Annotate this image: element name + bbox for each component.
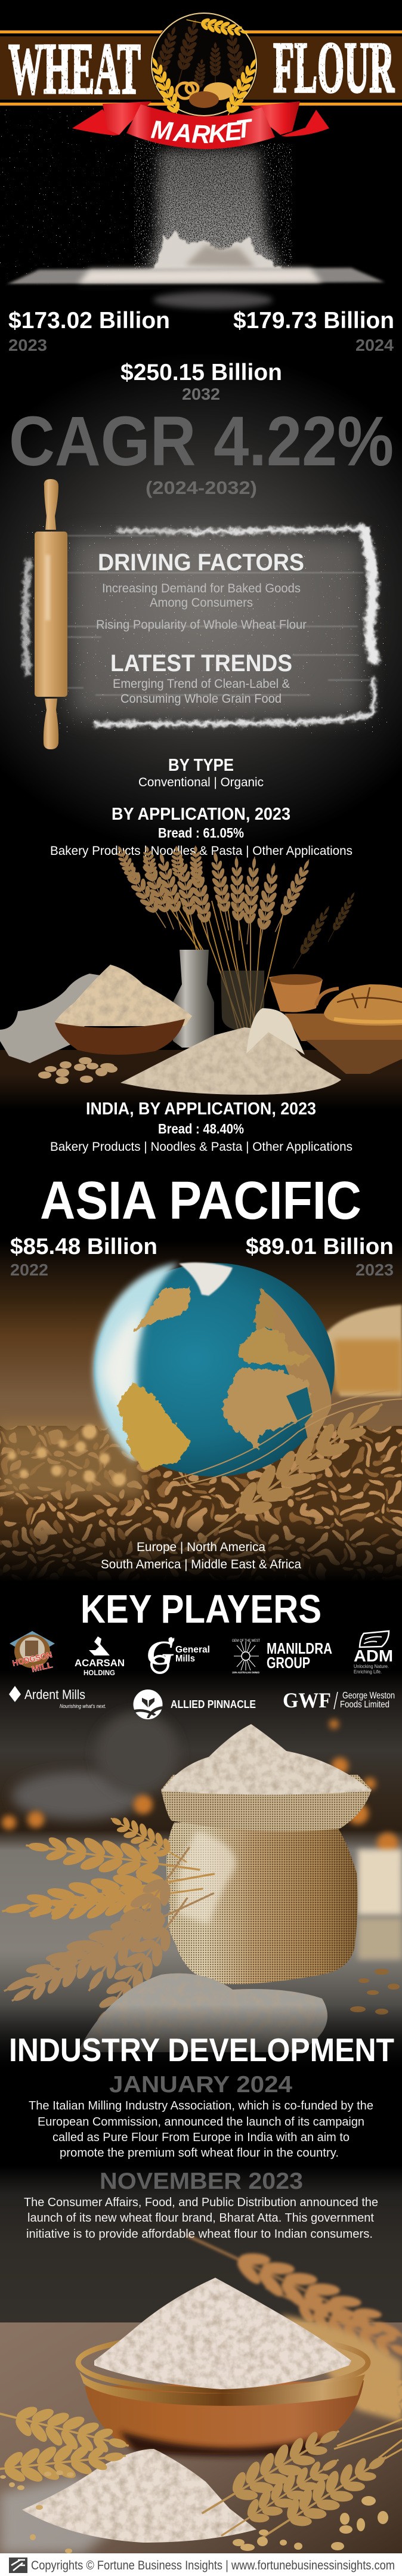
bokeh background (2, 1712, 402, 1960)
logo: Ardent Mills: Ardent Mills (24, 1687, 85, 1702)
text block: January 2024 (29, 2099, 373, 2160)
text block: latest trends (113, 677, 290, 706)
stat: Asia Pacific 2023 (246, 1234, 394, 1279)
heading: Asia Pacific: ASIA PACIFIC (40, 1171, 361, 1231)
stat: Asia Pacific 2023: $89.01 Billion (246, 1234, 394, 1259)
segment: by type: BY TYPE (168, 756, 234, 775)
flour heap in sack (162, 1724, 372, 1794)
logo: ADM: Unlocking Nature. (354, 1663, 389, 1669)
text block: November 2023: initiative is to provide affordable wheat flour to Indian consumers. (26, 2227, 373, 2241)
segment: India by application: INDIA, BY APPLICATION, 2023 (86, 1099, 316, 1119)
wheat ears left (0, 1806, 222, 2039)
metal bottle (173, 950, 214, 1048)
stat: 2032 market size: 2032 (182, 385, 220, 403)
flour dust explosion (0, 107, 385, 308)
heading: latest trends: LATEST TRENDS (110, 650, 292, 677)
brown band (0, 36, 402, 100)
logo: General Mills: G (147, 1633, 174, 1672)
wheat ear (173, 1386, 402, 1561)
logo: Allied Pinnacle: ALLIED PINNACLE (171, 1698, 256, 1710)
panel: header banner (0, 12, 402, 308)
draped cloth (0, 974, 119, 1063)
wheat ears left (0, 2390, 134, 2492)
heading: November 2023: NOVEMBER 2023 (100, 2169, 303, 2194)
cutting boards (285, 1014, 402, 1074)
bread loaf (324, 984, 402, 1026)
logo: Acarsan Holding (75, 1636, 125, 1677)
panel: flour frame (24, 525, 388, 734)
stat: 2024 market size: $179.73 Billion (233, 308, 394, 333)
stat: 2023 market size (8, 308, 170, 354)
heading: January 2024: JANUARY 2024 (109, 2072, 292, 2098)
grain bed (0, 1423, 402, 1599)
footer (0, 2553, 402, 2576)
red ribbon (72, 101, 329, 149)
logo: Ardent Mills: Nourishing what's next. (60, 1703, 106, 1709)
blurred jar (326, 1305, 402, 1396)
text block: other regions: South America | Middle East & Africa (101, 1558, 301, 1571)
small flour heap (22, 2449, 256, 2543)
heading: driving factors: DRIVING FACTORS (98, 549, 304, 576)
flour heap and cloth (120, 1008, 341, 1095)
stat: 2024 market size (233, 308, 394, 354)
text block: January 2024: European Commission, announced the launch of its campaign (38, 2115, 364, 2129)
segment: by application: BY APPLICATION, 2023 (112, 805, 290, 824)
text block: latest trends: Consuming Whole Grain Food (120, 692, 282, 706)
illustration: bakery still life (0, 843, 402, 1110)
logo: General Mills (147, 1633, 210, 1673)
bowl of flour (55, 965, 192, 1055)
biscuits (38, 1057, 117, 1084)
logo: General Mills: General (175, 1645, 210, 1655)
stat: Asia Pacific 2022: $85.48 Billion (10, 1234, 157, 1259)
flour heap in bowl (94, 2278, 351, 2389)
wheat ears right (191, 2414, 402, 2556)
wooden bowl (78, 2334, 368, 2457)
blurred wheat top right (178, 2217, 402, 2422)
ribbon label: MARKET: MARKET (150, 114, 255, 149)
logo: Hodgson Mill: HODGSON (11, 1650, 53, 1668)
logo: Hodgson Mill: MILL (30, 1660, 54, 1674)
logo: Manildra Group: GEM OF THE WEST (232, 1639, 260, 1643)
text block: November 2023: launch of its new wheat flour brand, Bharat Atta. This government (27, 2211, 374, 2225)
logo: George Weston Foods: Foods Limited (340, 1700, 389, 1710)
segment: by type (138, 756, 264, 789)
segment: by application: Bread : 61.05% (158, 825, 244, 841)
logo: Hodgson Mill (10, 1631, 55, 1674)
logo: Manildra Group: GROUP (267, 1654, 310, 1672)
globe (94, 1262, 335, 1477)
logo: Manildra Group: MANILDRA (267, 1639, 332, 1657)
orange rule bottom (0, 103, 402, 106)
text block: November 2023: The Consumer Affairs, Food, and Public Distribution announced the (24, 2195, 378, 2209)
stat: 2024 market size: 2024 (355, 336, 394, 354)
logo: ADM (354, 1631, 393, 1675)
logo: George Weston Foods (283, 1688, 395, 1712)
logo: Allied Pinnacle (134, 1689, 256, 1719)
segment: India by application (50, 1099, 352, 1154)
segment: India by application: Bread : 48.40% (158, 1121, 244, 1136)
stat: 2023 market size: 2023 (8, 336, 47, 354)
icon: rolling pin (35, 479, 67, 749)
flour drift (78, 1973, 327, 2052)
logo: Manildra Group (232, 1639, 332, 1674)
stat: Asia Pacific 2023: 2023 (355, 1261, 394, 1279)
logo: ADM: ADM (354, 1647, 393, 1665)
panel: header banner: WHEAT (8, 29, 141, 109)
text block: other regions (101, 1540, 301, 1571)
logo: General Mills: Mills (175, 1654, 195, 1664)
stat: CAGR: (2024-2032) (146, 477, 257, 498)
stat: 2023 market size: $173.02 Billion (8, 308, 170, 333)
stat: 2032 market size: $250.15 Billion (120, 360, 282, 385)
stat: 2032 market size (120, 360, 282, 403)
illustration: flour sack (0, 1670, 402, 2070)
logo: Acarsan Holding: HOLDING (84, 1670, 115, 1677)
logo: George Weston Foods: GWF (283, 1688, 331, 1712)
illustration: flour bowl and wheat (0, 2166, 402, 2556)
text block: other regions: Europe | North America (137, 1540, 265, 1554)
orange rule top (0, 30, 402, 33)
logo: Ardent Mills (9, 1686, 106, 1709)
text block: driving factors: Among Consumers (150, 596, 253, 610)
text block: driving factors: Rising Popularity of Whole Wheat Flour (96, 618, 307, 632)
clay cup (269, 974, 339, 1012)
text block: January 2024: promote the premium soft wheat flour in the country. (60, 2146, 339, 2160)
burlap sack (166, 1823, 357, 1984)
icon: wheat emblem (145, 12, 264, 133)
segment: by type: Conventional | Organic (138, 776, 264, 789)
wheat bundle (112, 843, 359, 1031)
logo: Manildra Group: 100% AUSTRALIAN OWNED (232, 1671, 260, 1674)
grain scatter (350, 1969, 400, 2015)
text block: November 2023 (24, 2195, 378, 2241)
illustration: globe on wheat (0, 1241, 402, 1617)
text block: January 2024: called as Pure Flour From Europe in India with an aim to (52, 2130, 350, 2144)
sack collar (161, 1775, 372, 1831)
logo: Acarsan Holding: ACARSAN (75, 1657, 125, 1669)
segment: by application (50, 805, 352, 858)
glass jar (221, 971, 264, 1030)
text block: January 2024: The Italian Milling Industry Association, which is co-funded by the (29, 2099, 373, 2112)
icon: Fortune Business Insights logo (9, 2558, 27, 2573)
stat: Asia Pacific 2022 (10, 1234, 157, 1279)
text block: driving factors: Increasing Demand for Baked Goods (102, 582, 301, 595)
text block: latest trends: Emerging Trend of Clean-Label & (113, 677, 290, 691)
stat: Asia Pacific 2022: 2022 (10, 1261, 48, 1279)
segment: by application: Bakery Products | Noodles & Pasta | Other Applications (50, 844, 352, 858)
heading: key players: KEY PLAYERS (81, 1587, 321, 1632)
logo: ADM: Enriching Life. (354, 1669, 382, 1675)
text block: driving factors (96, 582, 307, 632)
panel: chalkboard glow (0, 352, 402, 853)
scattered grains (0, 2470, 388, 2553)
segment: India by application: Bakery Products | Noodles & Pasta | Other Applications (50, 1140, 352, 1154)
